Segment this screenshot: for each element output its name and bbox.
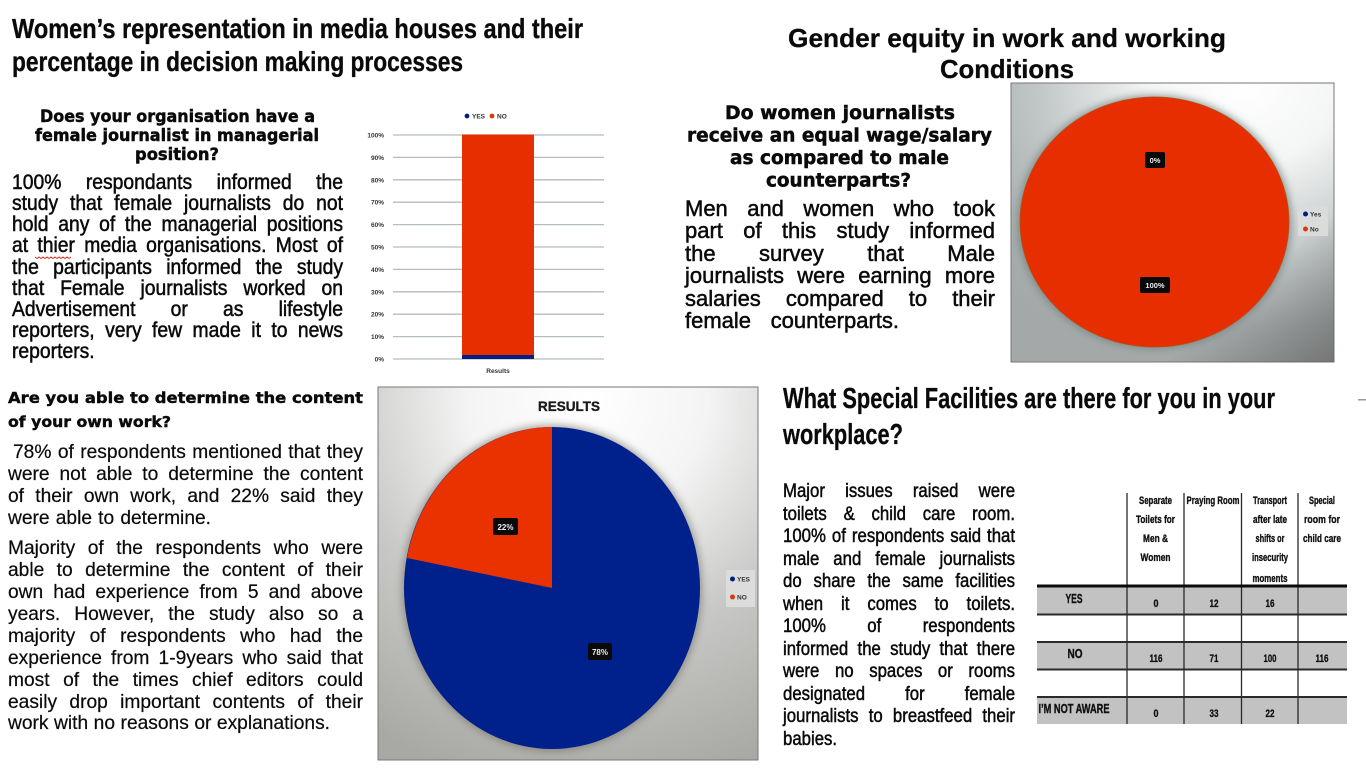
heading: content determination question (8, 389, 363, 431)
heading: equal wage question (687, 102, 993, 192)
text block: managerial position findings: Advertisement or as lifestyle (12, 298, 343, 321)
title: women's representation: percentage in decision making processes (12, 46, 463, 77)
title: women's representation: Women’s representation in media houses and their (12, 13, 583, 44)
text block: wage findings (684, 196, 996, 333)
text block: managerial position findings: at thier media organisations. Most of (12, 234, 343, 257)
stacked bar chart (367, 114, 604, 375)
pie slice: NO 22% (407, 427, 552, 588)
text block: wage findings: salaries compared to their (685, 286, 995, 311)
data label 0% (1145, 152, 1165, 168)
title: special facilities (782, 383, 1275, 451)
text block: content determination findings: years. However, the study also so a (8, 604, 363, 625)
text block: managerial position findings: hold any of the managerial positions (12, 213, 343, 236)
text block: wage findings: the survey that Male (685, 241, 995, 266)
pie legend (1298, 206, 1328, 236)
text block: facilities findings: male and female journalists (783, 548, 1015, 570)
text block: facilities findings (782, 480, 1016, 750)
heading: equal wage question: receive an equal wage/salary (687, 124, 993, 146)
bar chart axis labels: 10% (371, 334, 384, 341)
table values: 16 (1266, 598, 1274, 610)
heading: managerial position question: position? (135, 145, 219, 164)
text block: content determination findings (8, 442, 364, 734)
text block: facilities findings: 100% of respondents said that (783, 525, 1015, 547)
text block: facilities findings: do share the same facilities (783, 570, 1015, 592)
bar chart legend: YES (472, 114, 486, 120)
bar chart axis labels: 100% (367, 132, 384, 140)
heading: managerial position question: Does your organisation have a (40, 107, 315, 126)
title: gender equity: Gender equity in work and working (788, 23, 1226, 53)
text block: facilities findings: when it comes to toilets. (783, 592, 1015, 614)
bar: YES segment (462, 355, 534, 359)
pie legend: No (1310, 226, 1319, 234)
bar chart axis labels: 20% (371, 312, 384, 319)
heading: equal wage question: Do women journalists (725, 102, 955, 124)
bar: NO segment (462, 134, 534, 355)
table rules (1037, 493, 1347, 724)
table column headers: Separate (1139, 495, 1172, 507)
text block: managerial position findings: study that female journalists do not (12, 192, 343, 215)
table column headers: room for (1304, 514, 1341, 526)
table column headers: Special (1309, 495, 1335, 507)
text block: wage findings: part of this study informed (685, 218, 995, 243)
table column headers: Transport (1253, 495, 1287, 507)
table column headers: after late (1253, 514, 1287, 526)
results chart title: RESULTS (538, 398, 600, 414)
text block: facilities findings: designated for female (783, 682, 1015, 704)
table row labels: YES (1066, 591, 1083, 606)
heading: equal wage question: counterparts? (766, 170, 911, 192)
table values: 100 (1264, 653, 1276, 665)
bar chart axis labels: 90% (371, 155, 384, 162)
text block: wage findings: journalists were earning more (685, 263, 995, 288)
table values: 0 (1154, 598, 1158, 610)
data label 78%: 78% (592, 648, 608, 657)
text block: content determination findings: 78% of respondents mentioned that they (13, 442, 363, 463)
table column headers: shifts or (1256, 533, 1285, 545)
data label 0%: 0% (1150, 156, 1161, 165)
table row labels (1038, 591, 1110, 716)
table values: 116 (1150, 653, 1162, 665)
text block: managerial position findings: the participants informed the study (12, 256, 343, 279)
table column headers: child care (1303, 533, 1341, 545)
results legend: YES (737, 576, 751, 584)
pie halo (1018, 95, 1292, 349)
text block: content determination findings: were not able to determine the content (8, 464, 363, 485)
results legend: NO (737, 594, 747, 602)
title: gender equity (788, 23, 1226, 84)
text block: content determination findings: were able to determine. (8, 508, 211, 529)
text block: content determination findings: own had experience from 5 and above (8, 582, 363, 603)
bar chart gridlines (393, 135, 604, 359)
results legend (726, 570, 755, 607)
text block: content determination findings: able to determine the content of their (8, 560, 363, 581)
bar chart legend: NO (497, 114, 507, 120)
results pie halo (402, 425, 702, 751)
pie chart: equal wage (1011, 83, 1334, 362)
table values: 0 (1154, 708, 1158, 720)
table row shading (1037, 586, 1347, 724)
table column headers: Toilets for (1136, 514, 1176, 526)
pie legend: Yes (1310, 212, 1322, 218)
text block: wage findings: female counterparts. (685, 308, 899, 333)
text block: facilities findings: babies. (783, 728, 837, 750)
text block: managerial position findings: 100% respondants informed the (12, 171, 343, 194)
bar chart axis labels: 30% (371, 289, 384, 296)
table column headers: Praying Room (1186, 495, 1240, 507)
table column headers: Women (1140, 552, 1171, 564)
title: gender equity: Conditions (940, 54, 1074, 84)
data label 22% (493, 518, 518, 535)
stray mark at right edge (1358, 399, 1366, 400)
facilities table (1037, 493, 1347, 724)
text block: content determination findings: Majority of the respondents who were (8, 538, 363, 559)
pie panel background (1011, 83, 1334, 362)
heading: content determination question: of your own work? (8, 413, 171, 431)
table values: 71 (1210, 653, 1218, 665)
text block: content determination findings: most of the times chief editors could (8, 670, 363, 691)
data label 100%: 100% (1145, 281, 1165, 290)
bar chart axis labels: 70% (371, 200, 384, 207)
text block: content determination findings: easily drop important contents of their (8, 692, 363, 713)
bar chart axis labels (367, 132, 384, 364)
table values: 12 (1210, 598, 1218, 610)
table values: 33 (1210, 708, 1218, 720)
bar chart category label: Results (486, 368, 510, 375)
table row labels: NO (1068, 646, 1082, 661)
text block: facilities findings: journalists to breastfeed their (783, 705, 1015, 727)
data label 78% (588, 643, 612, 660)
title: women's representation (12, 13, 583, 77)
heading: managerial position question (35, 107, 319, 164)
text block: managerial position findings: reporters. (12, 340, 95, 363)
data label 100% (1140, 277, 1170, 293)
bar chart axis labels: 40% (371, 267, 384, 274)
bar chart axis labels: 50% (371, 244, 384, 252)
heading: managerial position question: female journalist in managerial (35, 126, 319, 145)
text block: managerial position findings (12, 171, 344, 363)
text block: facilities findings: 100% of respondents (783, 615, 1015, 637)
table column headers: insecurity (1252, 552, 1289, 564)
text block: facilities findings: toilets & child care room. (783, 502, 1015, 524)
table values: 22 (1266, 708, 1274, 720)
text block: facilities findings: informed the study that there (783, 638, 1015, 660)
heading: content determination question: Are you able to determine the content (8, 389, 363, 407)
text block: content determination findings: work with no reasons or explanations. (8, 713, 330, 734)
table column headers: Men & (1143, 533, 1168, 545)
text block: wage findings: Men and women who took (685, 196, 995, 221)
pie panel corner shade (1011, 83, 1334, 362)
title: special facilities: workplace? (782, 419, 903, 451)
heading: equal wage question: as compared to male (730, 147, 949, 169)
bar chart legend (465, 114, 507, 120)
spelling squiggle under thier (35, 257, 71, 258)
text block: content determination findings: majority of respondents who had the (8, 626, 363, 647)
pie slice: No 100% (1020, 97, 1289, 347)
text block: content determination findings: of their own work, and 22% said they (8, 486, 363, 507)
text block: managerial position findings: reporters, very few made it to news (12, 319, 343, 342)
table column headers (1136, 495, 1341, 585)
pie slice: YES 78% (404, 427, 700, 749)
text block: managerial position findings: that Female journalists worked on (12, 277, 343, 300)
results panel background (378, 387, 758, 760)
text block: facilities findings: Major issues raised were (783, 480, 1015, 502)
bar chart axis labels: 80% (371, 177, 384, 184)
table row labels: I’M NOT AWARE (1038, 701, 1110, 716)
data label 22%: 22% (497, 523, 514, 532)
table values (1150, 598, 1328, 720)
bar chart axis labels: 60% (371, 222, 384, 229)
text block: content determination findings: experience from 1-9years who said that (8, 648, 363, 669)
bar chart axis labels: 0% (375, 356, 384, 364)
table values: 116 (1316, 653, 1328, 665)
table column headers: moments (1252, 573, 1288, 585)
text block: facilities findings: were no spaces or rooms (783, 660, 1015, 682)
pie chart: content results (378, 387, 758, 760)
